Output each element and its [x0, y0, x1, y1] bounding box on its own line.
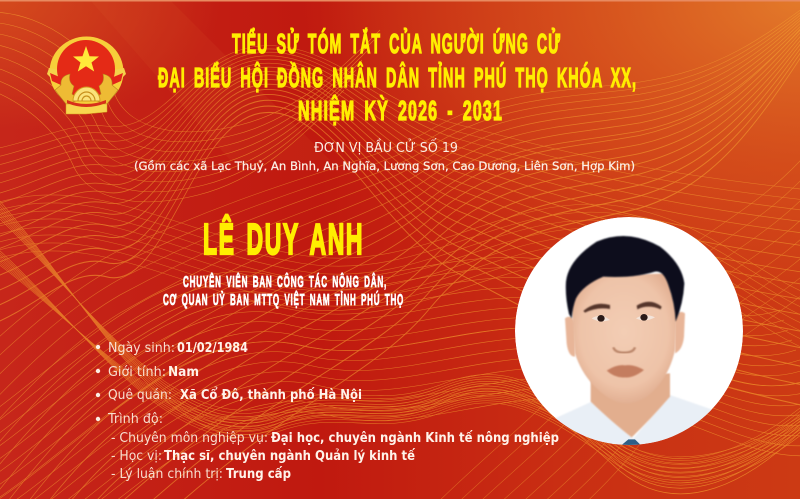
national emblem	[47, 36, 126, 114]
photo: pupils	[597, 314, 648, 322]
emblem: red disc	[57, 40, 115, 98]
list item: education: - Học vị:	[111, 449, 162, 464]
emblem: side tips	[47, 68, 126, 84]
photo: shirt	[555, 395, 713, 445]
emblem: rice ears	[55, 74, 118, 104]
constituency: ĐƠN VỊ BẦU CỬ SỐ 19	[314, 139, 458, 156]
portrait photo	[515, 217, 743, 445]
constituency: (Gồm các xã Lạc Thuỷ, An Bình, An Nghĩa, Lương Sơn, Cao Dương, Liên Sơn, Hợp Kim)	[134, 159, 635, 173]
emblem: banner red strip	[67, 100, 106, 107]
photo: ears	[565, 312, 685, 357]
list item: birth date	[96, 341, 248, 356]
list item: gender: Giới tính:	[108, 365, 166, 380]
position: CƠ QUAN UỶ BAN MTTQ VIỆT NAM TỈNH PHÚ THỌ	[163, 290, 404, 309]
list item: education: Đại học, chuyên ngành Kinh tế nông nghiệp	[271, 431, 559, 446]
list item: hometown: Xã Cổ Đô, thành phố Hà Nội	[180, 387, 362, 403]
constituency	[134, 139, 635, 173]
emblem: cog arcs	[78, 92, 95, 101]
list item: education: - Chuyên môn nghiệp vụ:	[111, 431, 268, 446]
emblem: wreath	[50, 36, 124, 108]
list item: education: - Lý luận chính trị:	[111, 467, 223, 482]
list item: gender	[96, 365, 199, 380]
list item: education: Trình độ:	[107, 412, 163, 427]
list item: gender: Nam	[168, 365, 199, 380]
list item: education	[96, 412, 559, 482]
photo: face	[572, 273, 677, 403]
list item: birth date: Ngày sinh:	[108, 341, 175, 356]
list item: hometown	[96, 387, 362, 403]
title: NHIỆM KỲ 2026 - 2031	[298, 95, 503, 126]
title	[158, 27, 637, 126]
emblem: star	[73, 46, 99, 72]
position: CHUYÊN VIÊN BAN CÔNG TÁC NÔNG DÂN,	[183, 272, 387, 291]
photo: nose	[613, 347, 635, 353]
photo: white backdrop	[515, 217, 743, 445]
emblem: red ribbons	[50, 73, 123, 85]
candidate name: LÊ DUY ANH	[203, 214, 364, 264]
photo: hair	[566, 236, 684, 322]
list item: birth date: 01/02/1984	[177, 341, 248, 356]
photo: mouth	[607, 365, 644, 377]
photo: neck	[591, 373, 670, 437]
photo: eyebrows	[583, 302, 662, 313]
position	[163, 272, 404, 309]
list item: education: Trung cấp	[226, 467, 291, 482]
emblem: cog	[73, 87, 100, 101]
list item: education: Thạc sĩ, chuyên ngành Quản lý kinh tế	[164, 449, 415, 464]
photo: eyes	[592, 315, 655, 321]
list item: hometown: Quê quán:	[108, 388, 172, 403]
emblem: banner	[66, 104, 107, 114]
personal details list	[96, 341, 559, 482]
photo: tie	[622, 439, 641, 445]
